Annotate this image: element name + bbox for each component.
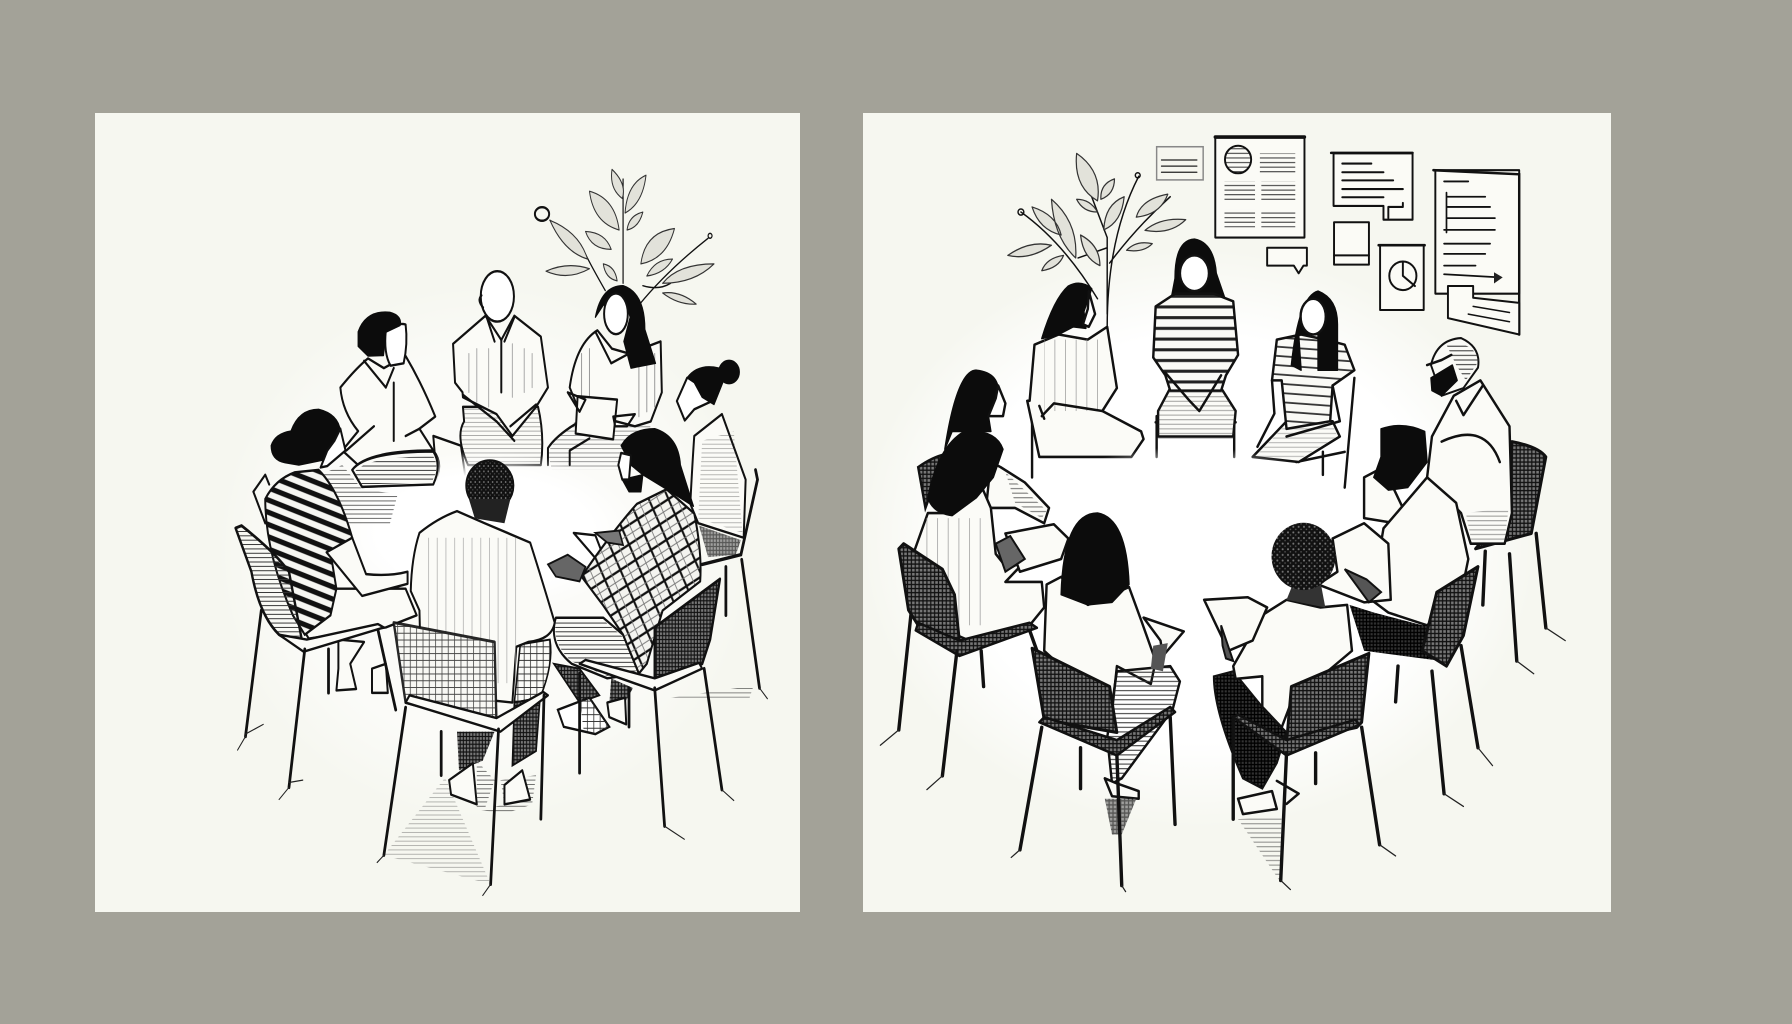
person: back left woman [918, 370, 1049, 523]
icon: open book [1005, 524, 1068, 572]
person: right upper man with glasses [1427, 338, 1565, 674]
person: right man with dark beard and paper [1318, 426, 1493, 806]
person: back row left woman [1027, 283, 1144, 477]
person: right front bearded man in plaid shirt [548, 429, 734, 839]
icon: document with circle chart [1215, 137, 1304, 238]
illustration: nine people in a circle [860, 137, 1565, 892]
panel: left discussion circle [95, 113, 800, 912]
icon: small card [1334, 222, 1369, 265]
person: front left woman with book [880, 431, 1068, 790]
icon: overlapping sheet [1448, 286, 1519, 334]
chair: left woman [236, 526, 396, 799]
person: top right woman with paper [548, 286, 662, 470]
person: back row centre woman in stripes [1153, 239, 1238, 457]
icon: large document with arrow [1433, 170, 1519, 334]
icon: clipboard [574, 533, 611, 577]
person: right woman with hair bun [671, 360, 767, 699]
icon: pie chart card [1379, 245, 1425, 310]
icon: plant with branches [1008, 153, 1186, 327]
person: left woman in striped shirt [236, 409, 417, 799]
person: centre man seen from behind [377, 460, 555, 895]
icon: speech bubble with text lines [1331, 153, 1413, 220]
chair: right front man [580, 579, 734, 839]
chair: right woman [671, 470, 767, 699]
icon: paper held by woman [576, 396, 617, 439]
person: front right woman with curly hair [1204, 523, 1396, 890]
icon: small note card [1157, 147, 1203, 180]
person: top left man with short hair [340, 312, 466, 487]
chair: centre man [377, 623, 548, 895]
fade: white floor centre [330, 451, 639, 615]
chair: right man [1396, 567, 1493, 806]
illustration: seven people in a circle [216, 169, 767, 895]
chair: upper right man [1476, 442, 1565, 674]
person: front woman with dark hair and book [1011, 513, 1184, 892]
panel: right discussion circle with wall documents [860, 113, 1611, 912]
fade: white floor centre [1020, 447, 1359, 600]
chair: front right woman [1233, 653, 1396, 890]
icon: open book [1144, 618, 1184, 656]
person: back row right woman [1253, 291, 1354, 488]
icon: open book [1204, 597, 1267, 651]
icon: plant with leaves [535, 169, 714, 305]
chair: front woman [1011, 648, 1175, 892]
chair: front left woman [880, 544, 1037, 790]
person: top centre bald man [453, 271, 548, 465]
icon: paper held by man [1318, 523, 1391, 602]
icon: small speech bubble [1267, 248, 1307, 273]
